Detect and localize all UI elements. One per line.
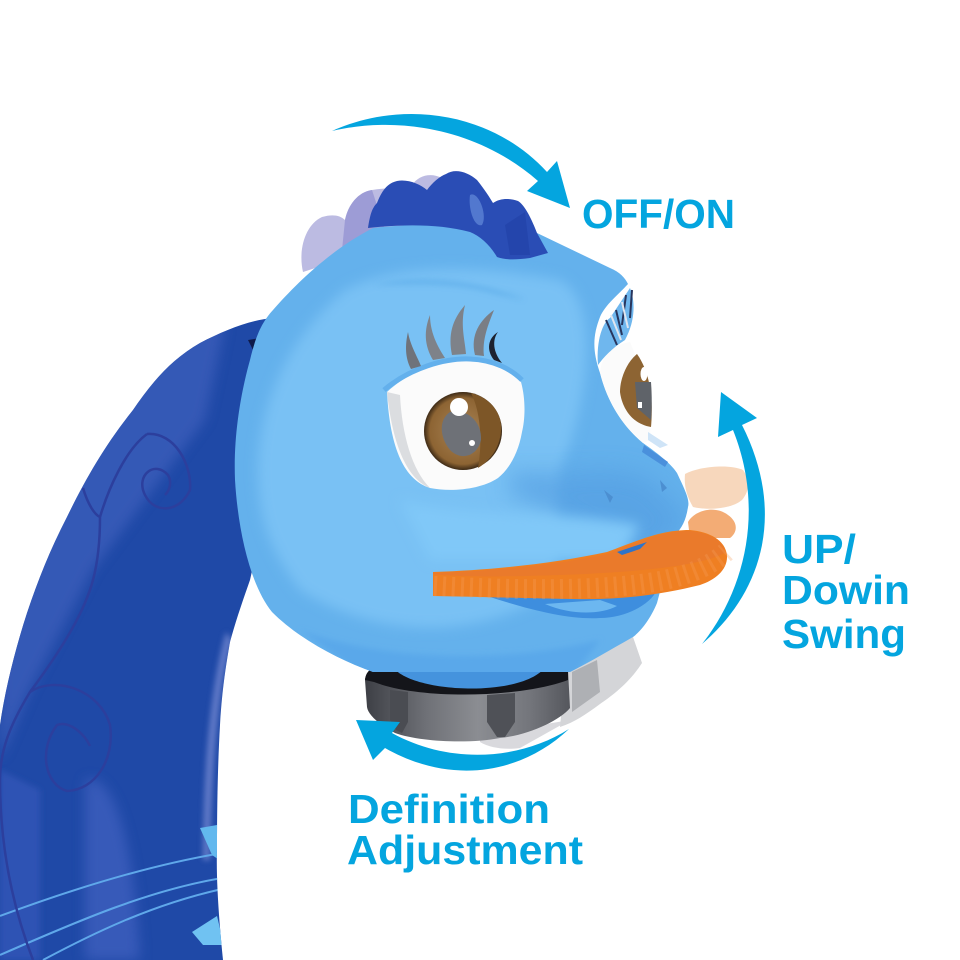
- faded swing motion of tongue: [685, 467, 748, 538]
- iris: [424, 392, 502, 470]
- left eye: [384, 359, 524, 490]
- label: off/on: OFF/ON: [582, 191, 735, 237]
- nostrils: [604, 432, 668, 503]
- arrow: definition adjustment: [356, 720, 569, 771]
- right eye: [600, 342, 652, 443]
- orange tongue: [433, 530, 727, 599]
- label: up/down swing: Swing: [782, 611, 906, 657]
- lower lip shadow: [490, 590, 657, 618]
- left eyelashes: [406, 305, 502, 369]
- under-head blue collar: [392, 666, 546, 689]
- dial notches: [390, 690, 408, 733]
- light grey far side of dial: [560, 637, 642, 727]
- eyelid: [384, 359, 522, 390]
- label: up/down swing: [782, 526, 910, 657]
- front crest: [368, 171, 548, 259]
- label: up/down swing: Dowin: [782, 567, 910, 613]
- head: [230, 220, 700, 680]
- arrow: up/down swing: [702, 392, 765, 644]
- label: definition adjustment: Adjustment: [347, 827, 583, 873]
- back crest: [301, 175, 470, 272]
- label: definition adjustment: Definition: [348, 786, 550, 832]
- arrow: off/on: [332, 114, 570, 208]
- label: up/down swing: UP/: [782, 526, 856, 572]
- shadow under dial: [480, 720, 570, 749]
- right iris: [620, 354, 652, 427]
- dark body of dial: [365, 668, 570, 741]
- label: definition adjustment: [347, 786, 583, 873]
- neck: [0, 318, 266, 960]
- ring: definition dial: [365, 637, 642, 749]
- right eyelashes: [598, 288, 634, 365]
- pupil: [442, 411, 481, 456]
